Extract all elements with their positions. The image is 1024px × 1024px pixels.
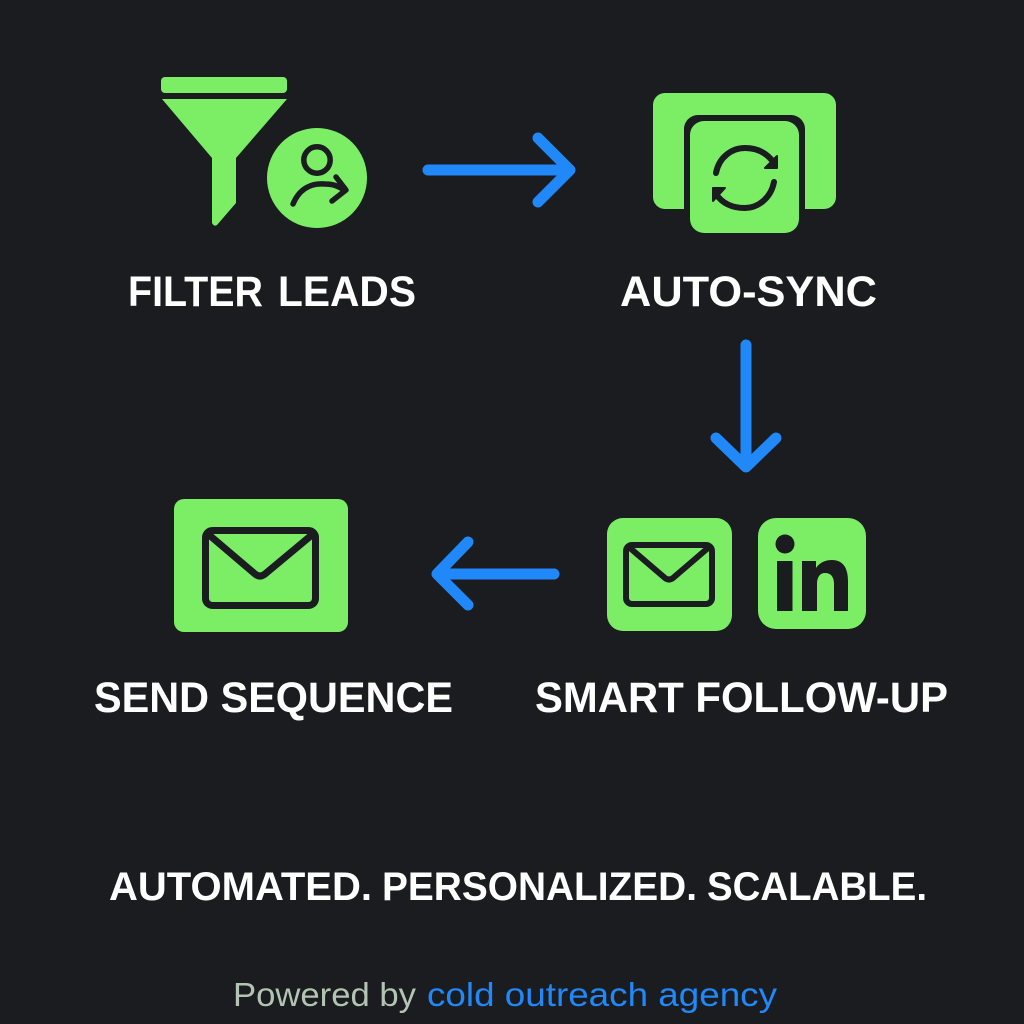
heading: filter leads bbox=[128, 268, 416, 316]
heading: filter leads: LEADS bbox=[278, 268, 416, 316]
heading: smart follow-up: SMART FOLLOW-UP bbox=[535, 674, 948, 722]
icon: auto-sync cards bbox=[653, 93, 836, 240]
heading: filter leads: FILTER bbox=[128, 268, 263, 316]
arrow: sync to follow-up bbox=[716, 345, 776, 467]
tagline: AUTOMATED. bbox=[109, 865, 372, 909]
footer: powered by bbox=[233, 976, 778, 1013]
icon: large email bbox=[174, 499, 348, 632]
footer: powered by: Powered by bbox=[233, 976, 417, 1013]
icon: linkedin bbox=[758, 518, 866, 629]
arrow: follow-up to sequence bbox=[437, 542, 554, 605]
icon: small email bbox=[607, 518, 732, 631]
arrow: filter to sync bbox=[428, 138, 570, 202]
tagline: SCALABLE. bbox=[707, 865, 927, 909]
footer: powered by: cold outreach agency bbox=[427, 976, 778, 1013]
tagline: PERSONALIZED. bbox=[382, 865, 697, 909]
icon: funnel with lead bbox=[161, 77, 367, 228]
tagline bbox=[109, 865, 927, 909]
heading: send sequence: SEND SEQUENCE bbox=[94, 674, 453, 722]
heading: auto-sync: AUTO-SYNC bbox=[620, 268, 877, 316]
